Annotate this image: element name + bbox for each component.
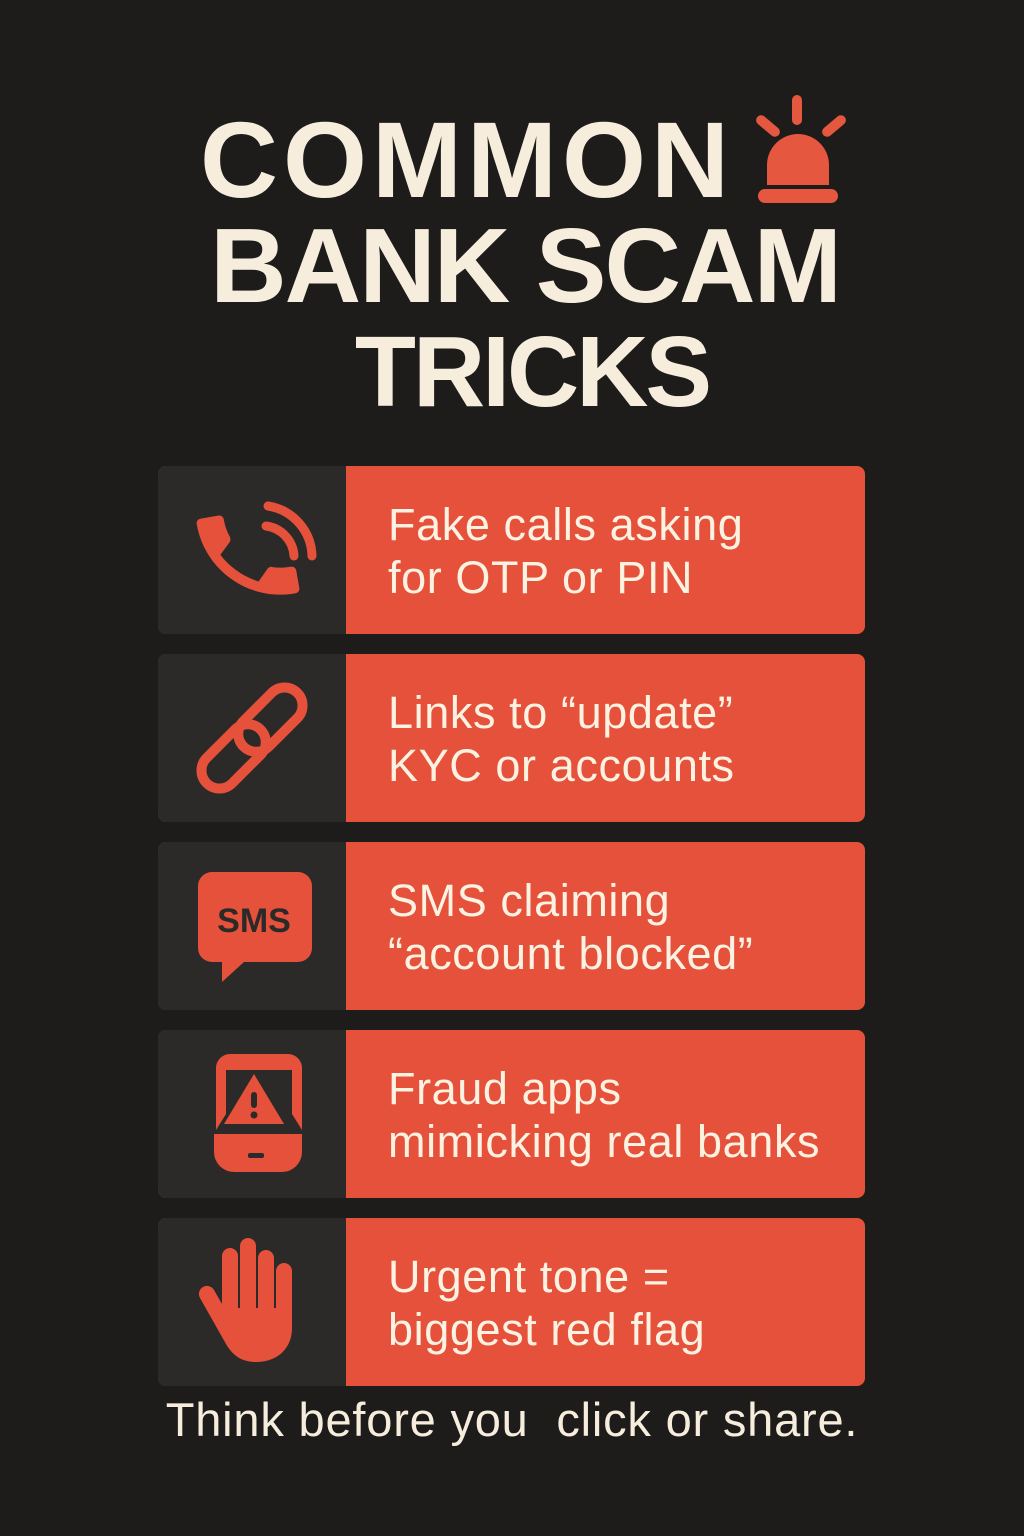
panel: sms <box>158 842 865 1010</box>
title: COMMON <box>200 99 734 220</box>
title: TRICKS <box>355 316 709 428</box>
title <box>200 95 846 428</box>
text <box>388 499 743 603</box>
text <box>388 687 735 791</box>
panel: urgent tone <box>158 1218 865 1386</box>
panel: fraud apps <box>158 1030 865 1198</box>
footer tagline: Think before you click or share. <box>166 1393 858 1446</box>
text: SMS claiming <box>388 875 670 926</box>
icon: phone <box>158 466 346 634</box>
text: Fraud apps <box>388 1063 622 1114</box>
text: Fake calls asking <box>388 499 743 550</box>
panel: links <box>158 654 865 822</box>
text <box>388 1251 705 1355</box>
text: mimicking real banks <box>388 1116 820 1167</box>
text: Urgent tone = <box>388 1251 670 1302</box>
icon: hand <box>158 1218 346 1386</box>
text: biggest red flag <box>388 1304 705 1355</box>
icon: alarm siren <box>756 95 846 203</box>
text <box>388 875 753 979</box>
panel: fake calls <box>158 466 865 634</box>
icon: sms bubble: SMS <box>217 902 291 940</box>
text: KYC or accounts <box>388 740 735 791</box>
text <box>388 1063 820 1167</box>
icon: phone warning <box>158 1030 346 1198</box>
text: for OTP or PIN <box>388 552 693 603</box>
text: Links to “update” <box>388 687 733 738</box>
title: BANK SCAM <box>210 207 840 325</box>
text: “account blocked” <box>388 928 753 979</box>
icon: link <box>158 654 346 822</box>
icon: sms bubble <box>158 842 346 1010</box>
